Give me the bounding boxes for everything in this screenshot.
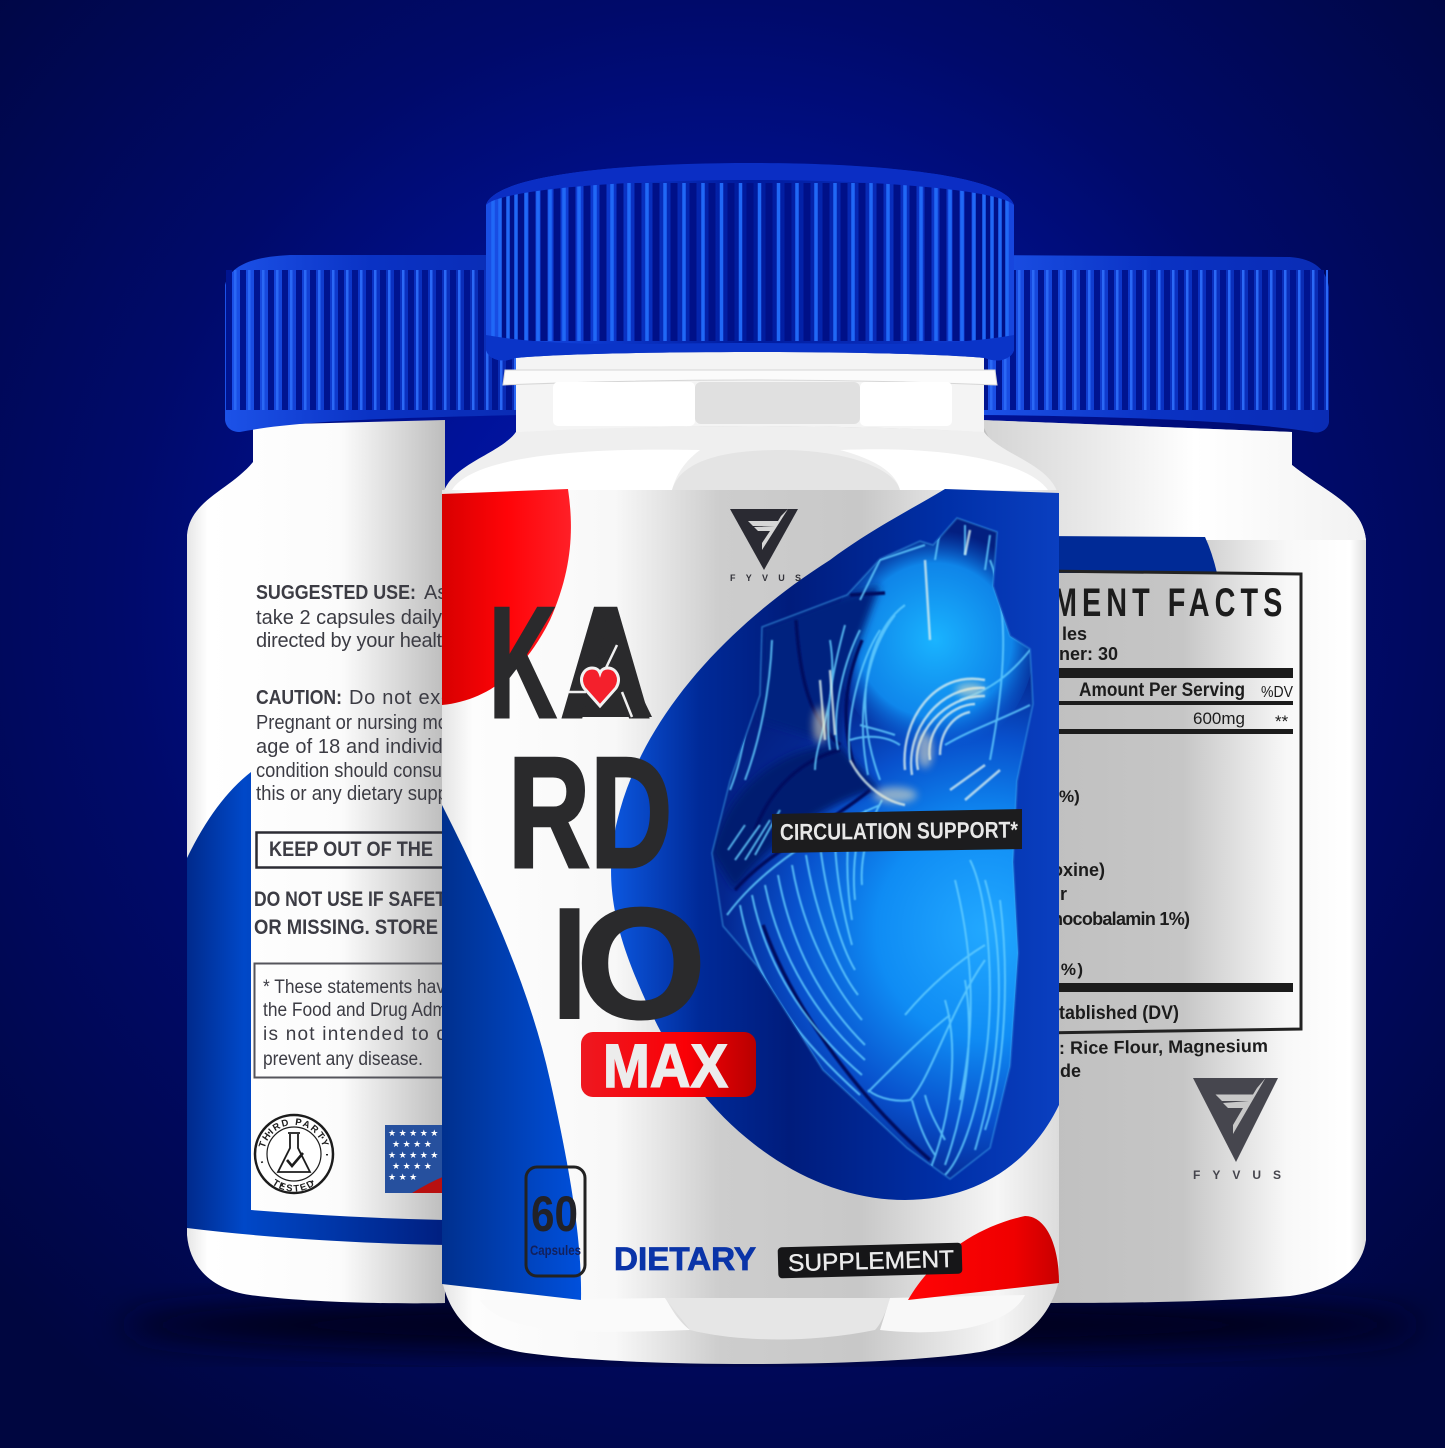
third party tested badge	[254, 1114, 334, 1194]
disclaimer box	[254, 964, 454, 1078]
safety warning: OR MISSING. STORE	[254, 916, 438, 939]
supplement facts panel: : Rice Flour, Magnesium	[1059, 1036, 1268, 1058]
suggested use text: take 2 capsules daily	[256, 607, 442, 629]
supplement facts panel: 0%)	[1050, 960, 1083, 979]
back left bottle	[187, 255, 516, 1304]
heart: pale highlights	[820, 530, 1000, 805]
supplement facts panel: Amount Per Serving	[1079, 680, 1245, 701]
keep out box	[256, 832, 456, 868]
bottle body: left	[187, 420, 445, 1303]
brand name: RD: RD	[508, 725, 672, 901]
supplement facts panel: les	[1062, 624, 1087, 644]
supplement facts panel: r	[1060, 884, 1067, 904]
usa flag	[385, 1125, 445, 1193]
caution text: CAUTION:	[256, 687, 342, 709]
suggested use text: directed by your health	[256, 630, 453, 652]
caution text: this or any dietary supp	[256, 783, 448, 805]
circulation support tag: CIRCULATION SUPPORT*	[780, 817, 1018, 845]
caution text	[256, 687, 454, 805]
A cut lines	[569, 645, 632, 717]
blue wave: bottom left	[442, 805, 581, 1300]
supplement facts panel: MENT FACTS	[1053, 580, 1287, 625]
brand name: KA: K	[489, 576, 556, 751]
circulation support tag	[772, 809, 1022, 853]
label background	[442, 490, 1059, 500]
cap: right	[980, 255, 1329, 433]
safety warning: DO NOT USE IF SAFET	[254, 888, 446, 911]
supplement facts panel: de	[1060, 1061, 1081, 1081]
third party tested badge: THIRD PARTY	[258, 1118, 329, 1146]
heart illustration	[700, 510, 1040, 1190]
shoulder highlights	[452, 449, 1048, 490]
usa flag: ★ ★ ★ ★ ★	[388, 1128, 438, 1138]
cap grooves	[504, 183, 1003, 341]
max badge: MAX	[603, 1032, 728, 1100]
60 capsules badge: Capsules	[530, 1242, 581, 1258]
supplement facts panel: 600mg	[1193, 709, 1245, 728]
cap: left	[225, 255, 520, 432]
supplement tag: SUPPLEMENT	[788, 1246, 955, 1277]
heart: pale accents	[813, 683, 984, 803]
front bottle	[442, 350, 1059, 1364]
supplement facts panel: tablished (DV)	[1059, 1003, 1179, 1024]
third party tested badge: TESTED	[274, 1178, 314, 1192]
disclaimer box: is not intended to d	[263, 1024, 447, 1045]
red corner: bottom right	[908, 1216, 1059, 1300]
fyvus logo: front: FYVUS	[730, 573, 801, 583]
caution text: Pregnant or nursing mo	[256, 712, 448, 734]
supplement facts panel: %)	[1059, 787, 1080, 806]
supplement facts panel: %DV	[1261, 684, 1293, 701]
shoulder fill	[442, 426, 1059, 500]
red corner: top left	[442, 489, 571, 705]
heart: outline	[712, 518, 1033, 1179]
bottle body: front	[442, 426, 1059, 1364]
base highlights	[480, 1295, 1025, 1339]
supplement facts panel	[1040, 571, 1301, 1081]
supplement facts panel: **	[1275, 712, 1289, 731]
heart: body	[700, 510, 1040, 1190]
usa flag: ★ ★ ★ ★	[392, 1139, 432, 1149]
usa flag: ★ ★ ★ ★	[392, 1161, 432, 1171]
heart: cyan fibres	[727, 525, 1030, 1175]
bottle body: right	[980, 420, 1366, 1303]
back right bottle	[980, 255, 1366, 1303]
heart: dark vessel strokes	[735, 593, 930, 1160]
cap highlights	[493, 183, 1007, 341]
fyvus logo: front	[730, 509, 801, 583]
60 capsules badge	[526, 1167, 585, 1276]
blue label band: right	[1040, 536, 1217, 573]
60 capsules badge: 60	[531, 1186, 578, 1242]
supplement facts panel: ner: 30	[1059, 644, 1118, 664]
disclaimer box: prevent any disease.	[263, 1049, 423, 1070]
brand name: KA	[489, 575, 652, 751]
keep out box: KEEP OUT OF THE	[269, 838, 433, 861]
dietary text: DIETARY	[614, 1241, 756, 1277]
supplement facts panel: nocobalamin 1%)	[1052, 909, 1190, 929]
supplement facts panel: oxine)	[1052, 860, 1105, 880]
suggested use text: SUGGESTED USE:	[256, 582, 416, 604]
suggested use text: As	[424, 582, 447, 604]
fyvus logo: right	[1193, 1078, 1281, 1182]
cap: front	[480, 160, 1020, 370]
cap rim	[486, 163, 1014, 205]
suggested use text	[256, 582, 453, 652]
shoulder: right	[980, 420, 1366, 540]
blue label wrap: left	[187, 772, 445, 1245]
floor shadow	[120, 1295, 1420, 1355]
blue heart panel	[611, 489, 1059, 1200]
disclaimer box: the Food and Drug Adm	[263, 1000, 447, 1021]
usa flag: ★ ★ ★ ★ ★	[388, 1150, 438, 1160]
brand name: KA: A	[560, 575, 651, 751]
heart: dark chambers	[712, 585, 880, 890]
safety warning	[254, 888, 446, 939]
triangle body of A	[562, 610, 652, 717]
neck	[503, 350, 997, 445]
usa flag: ★ ★ ★	[388, 1172, 417, 1182]
caution text: condition should consul	[256, 760, 446, 782]
fyvus logo: right: FYVUS	[1193, 1168, 1281, 1182]
brand name: IO: I	[552, 876, 587, 1052]
caution text: Do not exc	[349, 687, 451, 709]
disclaimer box: * These statements hav	[263, 977, 445, 998]
brand name: IO: O	[576, 876, 706, 1052]
icon: heart on A	[582, 668, 618, 706]
caution text: age of 18 and individu	[256, 736, 454, 758]
